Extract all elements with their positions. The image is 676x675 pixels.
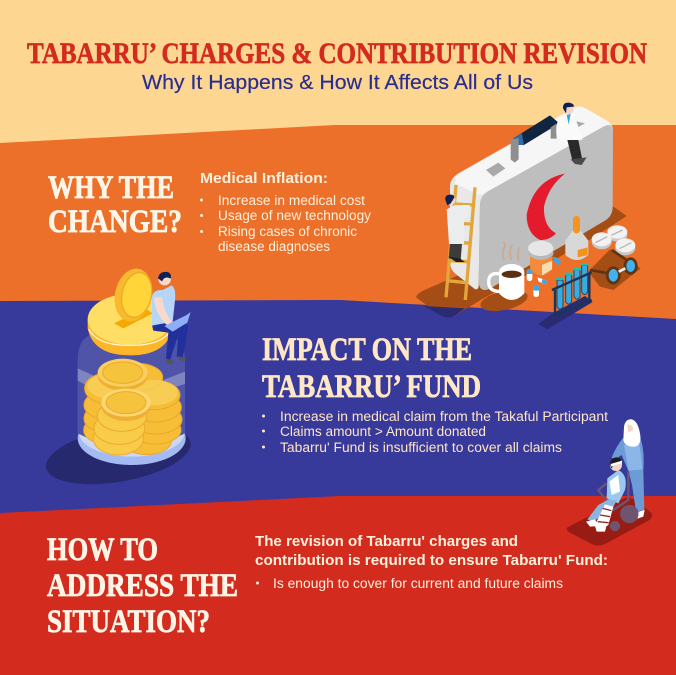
illustration: medical briefcase bbox=[416, 103, 641, 329]
illustration: nurse and wheelchair bbox=[567, 419, 652, 546]
icon: coin bbox=[110, 265, 157, 325]
heading: how to address: ADDRESS THE bbox=[47, 568, 238, 604]
text block: revision: Is enough to cover for current and future claims bbox=[273, 576, 563, 591]
text block: medical inflation: Increase in medical cost bbox=[218, 193, 365, 208]
icon: patient bbox=[586, 457, 626, 532]
panel: why the change bbox=[0, 125, 676, 330]
icon: ladder bbox=[446, 185, 475, 300]
panel: impact on fund bbox=[0, 300, 676, 520]
text block: medical inflation: Usage of new technology bbox=[218, 208, 371, 223]
text block: revision: The revision of Tabarru' charges and bbox=[255, 534, 518, 550]
icon: glasses bbox=[590, 250, 636, 283]
icon: coffee mug bbox=[489, 242, 524, 300]
text block: medical inflation: Medical Inflation: bbox=[200, 171, 328, 187]
text block: impact bullets: Claims amount > Amount donated bbox=[280, 424, 486, 439]
text block: impact bullets bbox=[262, 409, 608, 455]
icon: test tubes bbox=[552, 264, 592, 317]
text block: impact bullets: Tabarru' Fund is insufficient to cover all claims bbox=[280, 440, 562, 455]
icon: wheelchair bbox=[598, 472, 637, 530]
icon: doctor sitting bbox=[556, 103, 587, 165]
heading: impact on fund: TABARRU’ FUND bbox=[262, 369, 481, 405]
heading: why the change: WHY THE bbox=[48, 170, 174, 206]
text block: medical inflation: Rising cases of chronic bbox=[218, 224, 357, 239]
jar lid bbox=[88, 294, 173, 355]
heading: how to address: HOW TO bbox=[47, 532, 158, 568]
text block: medical inflation bbox=[200, 171, 371, 254]
icon: man with laptop bbox=[152, 272, 191, 365]
subtitle: Why It Happens & How It Affects All of Us bbox=[142, 71, 533, 94]
panel: how to address bbox=[0, 496, 676, 675]
icon: capsules bbox=[527, 257, 561, 297]
text block: revision bbox=[255, 534, 608, 591]
icon: tablets bbox=[592, 225, 635, 255]
heading: impact on fund: IMPACT ON THE bbox=[262, 332, 472, 368]
illustration: coin jar bbox=[41, 265, 195, 494]
text block: medical inflation: disease diagnoses bbox=[218, 239, 330, 254]
coins in jar bbox=[84, 359, 182, 455]
heading: impact on fund bbox=[262, 332, 481, 405]
icon: nurse bbox=[612, 419, 645, 519]
text block: impact bullets: Increase in medical claim from the Takaful Participant bbox=[280, 409, 608, 424]
heading: how to address: SITUATION? bbox=[47, 604, 210, 640]
heading: how to address bbox=[47, 532, 238, 640]
icon: doctor on ladder bbox=[445, 195, 470, 262]
panel: title background bbox=[0, 0, 676, 150]
heading: why the change: CHANGE? bbox=[48, 204, 182, 240]
text block: revision: contribution is required to ensure Tabarru' Fund: bbox=[255, 553, 608, 569]
heading: why the change bbox=[48, 170, 182, 240]
icon: pill bottle bbox=[528, 241, 553, 275]
icon: dropper bottle bbox=[565, 216, 588, 260]
